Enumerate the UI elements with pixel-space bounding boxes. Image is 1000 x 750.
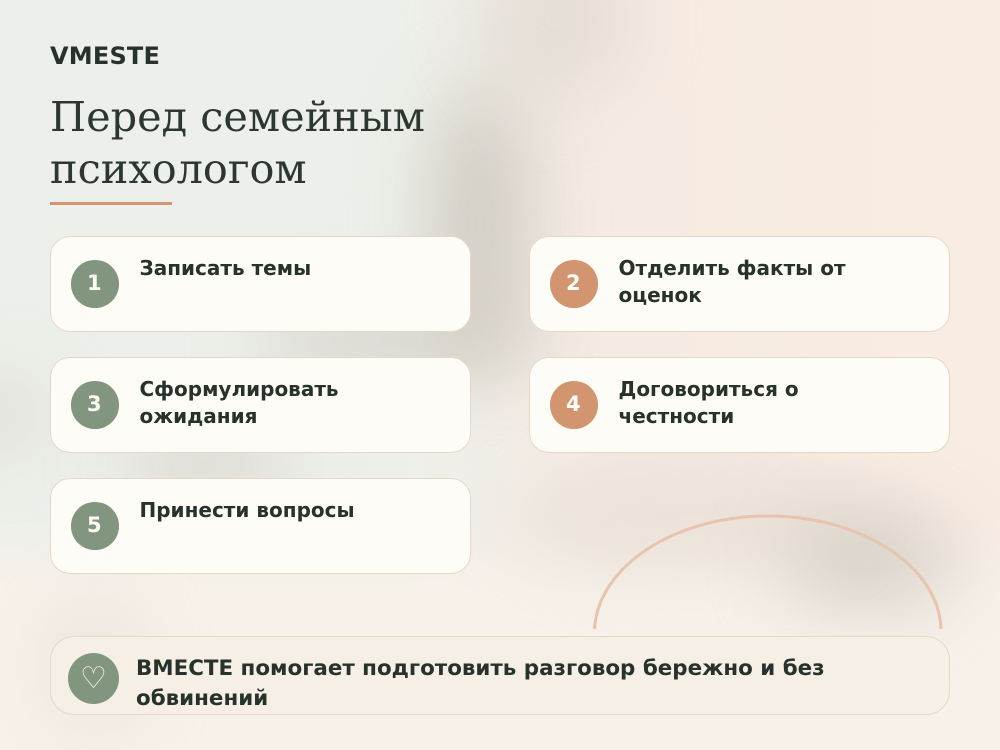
brand name: VMESTE <box>50 42 160 70</box>
label 3 <box>140 377 339 428</box>
icon: heart: ♡ <box>80 661 107 696</box>
footer text <box>136 656 825 711</box>
footer text: ВМЕСТЕ помогает подготовить разговор бережно и без <box>136 656 825 681</box>
title: психологом <box>50 145 307 193</box>
number 3: 3 <box>87 392 102 416</box>
decorative arc <box>593 514 942 630</box>
label 4: Договориться о <box>618 377 799 401</box>
number 4: 4 <box>566 392 581 416</box>
card 1 <box>50 236 471 332</box>
label 2 <box>618 256 846 307</box>
number 3 <box>71 381 118 428</box>
number 1: 1 <box>87 271 102 295</box>
number 4 <box>550 381 598 428</box>
card 3 <box>50 357 471 453</box>
footer text: обвинений <box>136 686 268 711</box>
label 3: Сформулировать <box>140 377 339 401</box>
label 4: честности <box>618 404 734 428</box>
title underline <box>50 202 172 205</box>
label 2: оценок <box>618 283 702 307</box>
label 1: Записать темы <box>140 256 311 280</box>
card 2 <box>529 236 950 332</box>
title: Перед семейным <box>50 93 425 141</box>
card 5 <box>50 478 471 574</box>
footer banner <box>50 636 950 715</box>
label 5: Принести вопросы <box>140 498 355 522</box>
card 4 <box>529 357 950 453</box>
icon: heart <box>68 653 119 704</box>
number 1 <box>71 260 118 308</box>
label 2: Отделить факты от <box>618 256 846 280</box>
title <box>50 93 425 193</box>
number 2 <box>550 260 598 308</box>
label 3: ожидания <box>140 404 257 428</box>
label 4 <box>618 377 799 428</box>
number 2: 2 <box>566 271 581 295</box>
number 5 <box>71 502 118 550</box>
number 5: 5 <box>87 513 102 537</box>
